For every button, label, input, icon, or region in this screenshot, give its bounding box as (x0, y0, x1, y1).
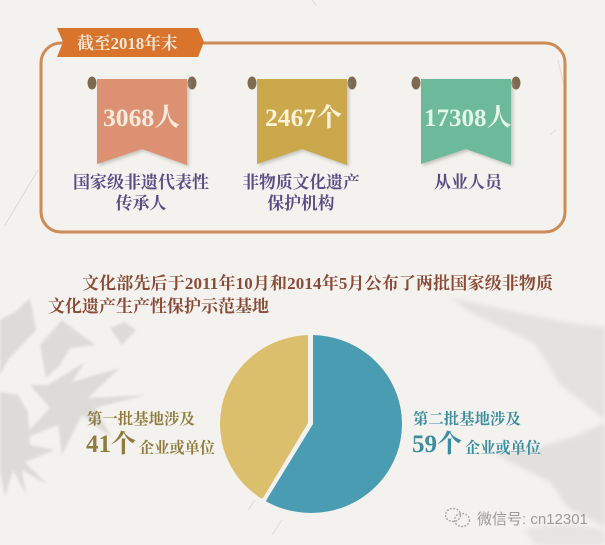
label: practitioners: 从业人员 (434, 173, 505, 192)
label: second batch: 第二批基地涉及 (413, 409, 521, 428)
label: inheritors (73, 172, 209, 213)
watermark (446, 508, 588, 528)
banner: institutions (248, 76, 356, 167)
background: ink bamboo (0, 298, 146, 497)
intro text (48, 273, 553, 316)
banner: institutions: 2467个 (265, 103, 342, 132)
label: second batch (412, 409, 541, 458)
label: institutions: 保护机构 (267, 193, 335, 213)
heading ribbon (57, 28, 204, 57)
banner: practitioners: 17308人 (424, 105, 512, 132)
label: first batch (86, 409, 215, 458)
panel: end of 2018 stats (41, 28, 565, 232)
label: first batch: 第一批基地涉及 (87, 409, 195, 428)
banner: practitioners (412, 76, 520, 167)
label: second batch: 企业或单位 (465, 439, 541, 457)
icon: wechat (446, 508, 470, 526)
intro text: 文化遗产生产性保护示范基地 (48, 296, 269, 316)
background: ink roof (450, 298, 605, 545)
label: institutions: 非物质文化遗产 (242, 172, 360, 192)
label: inheritors: 传承人 (116, 194, 166, 213)
label: inheritors: 国家级非遗代表性 (73, 172, 209, 192)
label: institutions (242, 172, 360, 213)
pie chart (220, 335, 402, 513)
banner: inheritors: 3068人 (103, 103, 180, 132)
label: first batch: 企业或单位 (139, 439, 215, 457)
watermark: 微信号: cn12301 (477, 511, 588, 528)
heading ribbon: 截至2018年末 (77, 33, 178, 53)
banner: inheritors (88, 76, 196, 167)
intro text: 文化部先后于2011年10月和2014年5月公布了两批国家级非物质 (82, 273, 553, 293)
label: second batch: 59个 (412, 430, 462, 458)
label: first batch: 41个 (86, 430, 136, 458)
panel border (41, 43, 565, 232)
pie slice: second batch 59% (266, 335, 402, 513)
pie slice: first batch 41% (220, 335, 308, 498)
